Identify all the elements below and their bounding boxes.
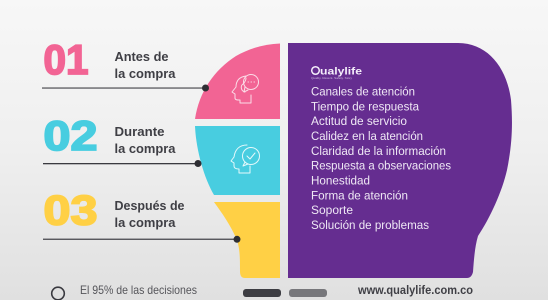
panel: blue head segment [195,126,280,195]
icon: head with check mark [231,145,260,173]
panel: purple list panel [288,43,512,278]
list: service attributes: Honestidad [311,174,370,188]
logo: qualylife: Quality. Resent. Safety. Story [311,76,353,80]
pagination pill grey [289,289,327,297]
number 03: 03 [44,186,98,234]
label: después de la compra: la compra [114,216,177,230]
connector line 1 [42,84,209,92]
list: service attributes: Calidez en la atención [311,129,423,143]
footnote text: El 95% de las decisiones [80,283,197,297]
list: service attributes: Solución de problemas [311,218,429,232]
list: service attributes: Canales de atención [311,84,415,98]
label: durante la compra [114,125,177,156]
website url: www.qualylife.com.co [357,285,473,297]
label: durante la compra: la compra [114,142,177,156]
list: service attributes: Soporte [311,203,353,217]
list: service attributes: Forma de atención [311,188,408,202]
label: durante la compra: Durante [114,125,165,139]
label: después de la compra [114,199,185,230]
connector line 3 [43,236,240,243]
connector line 2 [43,160,202,167]
number 02: 02 [44,112,98,159]
label: antes de la compra: Antes de [114,50,169,64]
list: service attributes: Claridad de la información [311,144,446,158]
list: service attributes [311,84,451,232]
icon: head with speech bubble [232,74,258,103]
label: antes de la compra [114,50,177,81]
list: service attributes: Respuesta a observaciones [311,159,451,173]
pagination pill dark [243,289,281,297]
panel: pink head segment [195,44,280,119]
number 01: 01 [44,36,88,83]
list: service attributes: Tiempo de respuesta [311,99,419,113]
label: después de la compra: Después de [114,199,185,213]
logo: qualylife: ualylife [320,66,362,78]
panel: yellow head segment [214,202,280,278]
logo: qualylife [311,66,362,80]
label: antes de la compra: la compra [114,67,177,81]
list: service attributes: Actitud de servicio [311,114,407,128]
bullet ring [52,287,64,300]
